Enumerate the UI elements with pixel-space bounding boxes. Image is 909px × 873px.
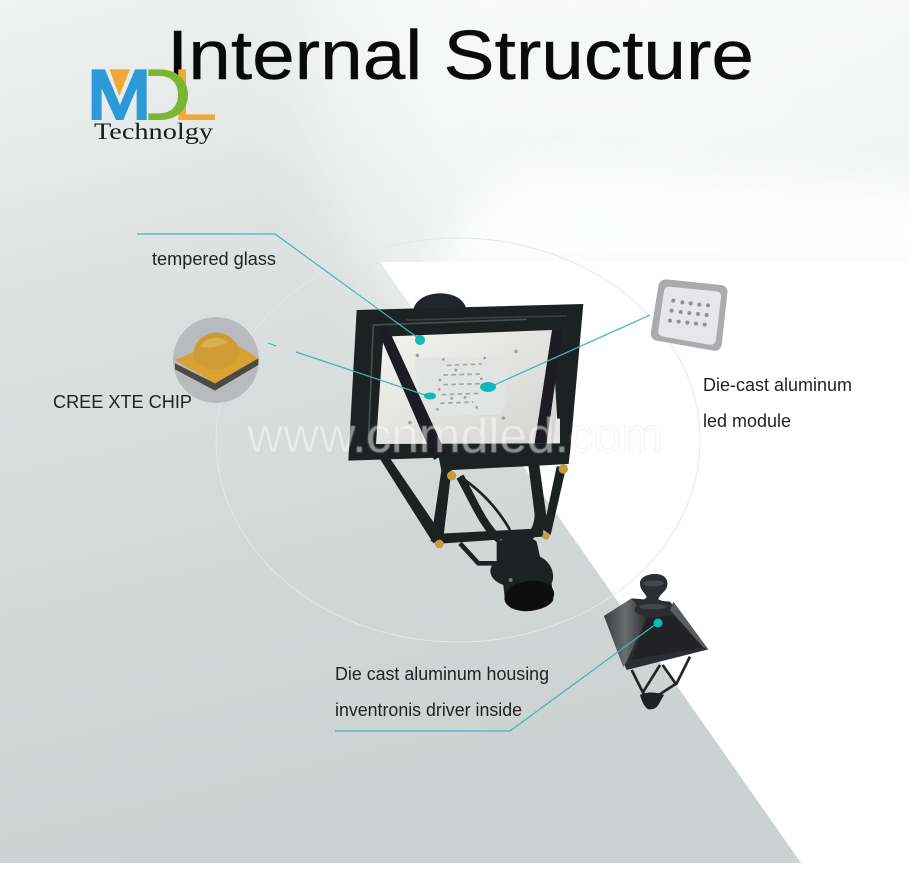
lamp brass bolts [435,464,568,548]
LED module on panel [408,350,518,424]
label: CREE XTE CHIP: CREE XTE CHIP [53,392,192,412]
lamp: main product photo [348,293,583,614]
chip: CREE XTE photo [173,317,259,403]
lamp right strut [535,330,563,443]
callout: tempered glass [137,234,425,345]
lamp frame [348,304,583,461]
callout: housing [335,618,662,731]
small lamp: housing photo [604,574,708,709]
lamp top dome [413,293,467,312]
module lens plate [658,287,721,345]
label: die cast aluminum housing, inventronis driver inside [335,664,549,720]
module housing [651,279,727,351]
module: die-cast aluminum LED module photo [651,279,727,351]
small lamp legs [632,657,690,698]
lamp cross bar [439,452,570,471]
logo wordmark: Technolgy [94,119,214,144]
watermark: www.cnmdled.com [246,409,663,463]
small lamp finial [635,574,670,617]
small lamp base [640,692,664,709]
label: die-cast aluminum led module [703,375,852,431]
logo mark [92,69,215,120]
lamp glass panel [376,330,559,444]
label: die-cast aluminum led module: led module [703,411,791,431]
chip base [175,358,258,391]
title: Internal Structure [167,16,754,94]
lamp inner frame highlight [368,319,527,443]
chip backdrop [173,317,259,403]
small lamp shade [604,598,708,670]
label: die cast aluminum housing, inventronis driver inside: Die cast aluminum housing [335,664,549,684]
logo: MDL Technolgy [92,69,215,144]
callout: module [480,315,650,392]
lamp diagonal strut [376,325,446,460]
label: tempered glass: tempered glass [152,249,276,269]
callout: chip [268,343,436,400]
callout lines and dots [137,234,662,731]
lamp arms and cable [460,477,538,563]
chip dome [193,333,239,369]
thin ellipse outline around lamp [216,238,700,642]
label: die cast aluminum housing, inventronis driver inside: inventronis driver inside [335,700,522,720]
label: die-cast aluminum led module: Die-cast aluminum [703,375,852,395]
lamp hub [490,537,553,611]
module LEDs [668,299,710,327]
